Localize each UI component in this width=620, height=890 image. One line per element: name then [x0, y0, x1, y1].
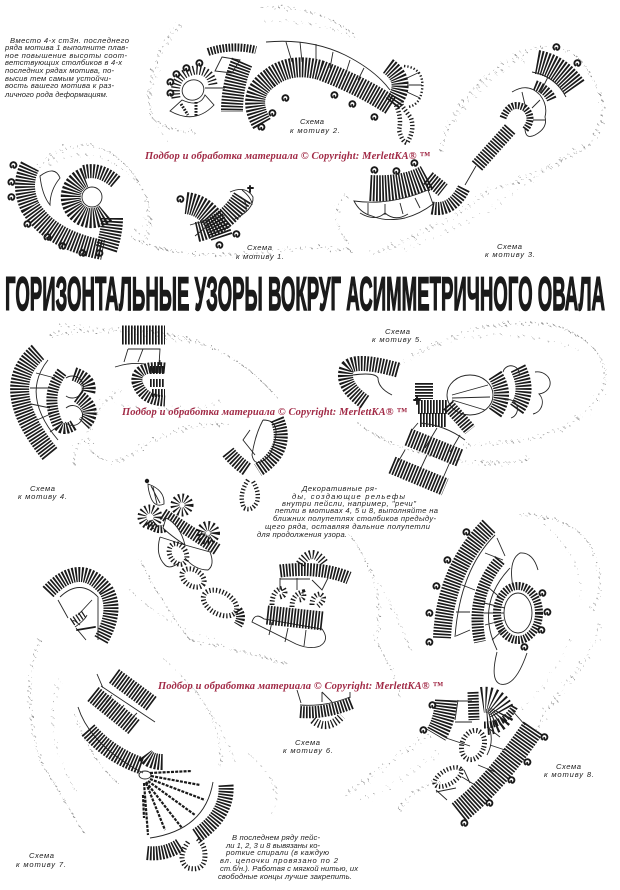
outer band [442, 526, 489, 638]
upper block [114, 676, 152, 704]
caption: motif 7: к мотиву 7. [16, 860, 66, 869]
watermark 3: Подбор и обработка материала © Copyright: MerlettKA® ™ [157, 681, 444, 692]
instruction text: row heights: Вместо 4-х ст3н. последнего [10, 36, 129, 45]
spiral tips [177, 196, 239, 248]
ladder 1 [408, 437, 460, 458]
caption: motif 8: к мотиву 8. [544, 770, 594, 779]
caption: motif 6 [283, 738, 333, 755]
instruction text: relief rows: щего ряда, оставляя дальние полупетли [265, 522, 431, 531]
spiral tips [8, 162, 102, 256]
caption: motif 2: Схема [300, 117, 324, 126]
spine [78, 707, 143, 773]
instruction text: row heights: высив тем самым устойчи- [5, 74, 111, 83]
caption: motif 3: к мотиву 3. [485, 250, 535, 259]
motif 4 fan diagram [20, 352, 90, 454]
arc band [484, 706, 515, 725]
motif 5 main diagram [392, 366, 550, 487]
caption: motif 8: Схема [556, 762, 581, 771]
diagonal band [163, 514, 218, 550]
upper bars [436, 700, 446, 735]
top stitch ticks [208, 47, 256, 52]
caption: motif 4: к мотиву 4. [18, 492, 67, 501]
lower loop [494, 652, 527, 684]
motif 1 triangle diagram [177, 186, 253, 248]
spiral tips [258, 92, 377, 130]
instruction text: relief rows: ближних полупетлях столбиков предыду- [273, 514, 436, 523]
caption: motif 6: Схема [295, 738, 320, 747]
instruction text: spirals: вл. цепочки провязано по 2 [220, 856, 339, 865]
caption: motif 5 [372, 327, 422, 344]
caption: motif 1 [236, 243, 284, 261]
instruction text: row heights: ветствующих столбиков в 4-х [5, 58, 123, 67]
instruction text: relief rows: петли в мотивах 4, 5 и 8, выполняйте на [275, 506, 438, 515]
caption: motif 1: к мотиву 1. [236, 252, 284, 261]
watermark 1: Подбор и обработка материала © Copyright: MerlettKA® ™ [144, 151, 430, 162]
bottom capsule [252, 616, 326, 648]
connecting rectangle [205, 57, 240, 88]
motif 7 main diagram [78, 674, 226, 869]
instruction text: relief rows: внутри пейсли, например, "речи" [282, 499, 416, 508]
motif 2 diagram [167, 41, 422, 143]
inner arc band [535, 85, 552, 100]
paisley spirals [272, 588, 324, 607]
crossing band left [186, 203, 222, 238]
outer band [25, 166, 103, 250]
caption: motif 4: Схема [30, 484, 55, 493]
centre dot [139, 771, 151, 779]
ladder [477, 128, 511, 166]
ring 3 [199, 585, 241, 621]
pendant loop [396, 103, 412, 143]
instruction text: row heights: ряда мотива 1 выполните плав- [4, 43, 128, 52]
band [48, 574, 111, 640]
centre oval [458, 727, 488, 763]
spirals [371, 160, 417, 174]
small fan [432, 188, 464, 209]
bars band [370, 177, 428, 188]
long curved band [255, 67, 392, 124]
caption: motif 2 [290, 117, 340, 135]
scallops [503, 366, 550, 418]
circle [447, 375, 493, 415]
outer band [20, 352, 50, 454]
round fans [142, 509, 158, 525]
motif 8 upper diagram [426, 526, 550, 684]
top spirals [553, 44, 580, 66]
caption: motif 1: Схема [247, 243, 272, 252]
instruction text: spirals: ли 1, 2, 3 и 8 вывязаны ко- [225, 841, 320, 850]
caption: motif 7: Схема [29, 851, 54, 860]
upper loop [512, 553, 538, 587]
caption: motif 2: к мотиву 2. [290, 126, 340, 135]
inner radial band [71, 177, 106, 218]
right band [258, 419, 281, 470]
top teardrop [148, 484, 164, 505]
instruction text: relief rows [257, 484, 438, 539]
instruction text: row heights: личного рода деформациям. [4, 90, 108, 99]
upper teardrop outline [243, 420, 276, 462]
instruction text: row heights: ное повышение высоты соот- [5, 51, 127, 60]
upper arc with ticks [266, 41, 390, 90]
top bars [122, 326, 165, 344]
instruction text: spirals: В последнем ряду пейс- [232, 833, 320, 842]
leaf [432, 763, 464, 791]
connecting frame [398, 423, 460, 478]
outer band [196, 785, 226, 836]
knot and lines [248, 186, 253, 192]
leaves [58, 600, 92, 640]
top fan [300, 554, 325, 564]
top fan bars [537, 62, 575, 88]
scallop outline [512, 88, 546, 136]
first ladder band [232, 62, 242, 112]
ring bars [497, 586, 539, 640]
instruction text: relief rows: ды, создающие рельефы [292, 492, 405, 501]
watermark 2: Подбор и обработка материала © Copyright: MerlettKA® ™ [121, 407, 408, 418]
caption: motif 7 [16, 851, 66, 869]
horseshoe [503, 106, 530, 130]
motif 5 arc fragment [345, 363, 398, 402]
pendant diagram [228, 419, 281, 509]
inner arch with ticks [30, 360, 60, 440]
middle band [478, 560, 500, 642]
caption: motif 3 [485, 242, 535, 259]
upper bars [280, 570, 349, 578]
caption: motif 5: к мотиву 5. [372, 335, 422, 344]
caption: motif 8 [544, 762, 594, 779]
instruction text: row heights [4, 36, 129, 99]
small fan [238, 610, 240, 625]
oval [504, 593, 532, 633]
frame [436, 708, 525, 800]
instruction text: spirals: ст.б/н.). Работая с мягкой нитью, их [220, 864, 359, 873]
motif 3 diagram [354, 44, 580, 220]
motif 8 lower diagram [420, 692, 547, 826]
left blocks [420, 383, 428, 399]
ties [97, 674, 155, 722]
frame [115, 349, 160, 367]
centre ring [82, 187, 102, 207]
instruction text: row heights: последних рядах мотива, по- [5, 66, 114, 75]
two small circles [65, 376, 83, 426]
frame lines [280, 578, 328, 590]
right fan [495, 375, 502, 413]
instruction text: spirals [218, 833, 359, 881]
lower bars [267, 615, 323, 621]
instruction text: row heights: вость вашего мотива к раз- [5, 81, 114, 90]
half oval bars [137, 368, 165, 401]
ring 2 [179, 565, 207, 591]
ladder 2 [392, 465, 445, 487]
scalloped edge [354, 190, 433, 220]
instruction text: relief rows: Декоративные ря- [301, 484, 377, 493]
top centre half-oval diagram [115, 335, 165, 401]
radial rays [143, 771, 205, 835]
instruction text: relief rows: для продолжения узора. [257, 530, 347, 539]
big band [458, 728, 533, 813]
inner arches [40, 171, 60, 205]
motif 6 lower fragment [297, 690, 352, 725]
crossing band right [197, 197, 243, 232]
right fan [74, 374, 90, 424]
dome [230, 189, 253, 220]
instruction text: spirals: свободные концы лучше закрепить. [218, 872, 352, 881]
light rays [88, 730, 142, 766]
instruction text: spirals: роткие спирали (в каждую [225, 848, 329, 857]
ring 1 [166, 540, 190, 568]
inner rays [484, 568, 510, 650]
radial fan [473, 692, 474, 720]
left ring band [52, 372, 74, 428]
left band [228, 452, 248, 470]
inner arc [150, 782, 213, 838]
motif 7 upper fragment [48, 574, 111, 640]
bead loop [182, 838, 205, 869]
first band [93, 694, 134, 727]
right fan and circle [388, 66, 422, 107]
curved band [448, 405, 470, 430]
caption: motif 5: Схема [385, 327, 410, 336]
caption: motif 6: к мотиву 6. [283, 746, 333, 755]
loop [242, 480, 258, 509]
motif 1 large fan diagram [8, 162, 116, 256]
motif 6 main diagram [142, 479, 349, 648]
inner arc [60, 588, 98, 640]
lower frame [163, 518, 185, 545]
caption: motif 4 [18, 484, 67, 501]
oval ring with spiral tips [167, 60, 214, 117]
caption: motif 3: Схема [497, 242, 522, 251]
